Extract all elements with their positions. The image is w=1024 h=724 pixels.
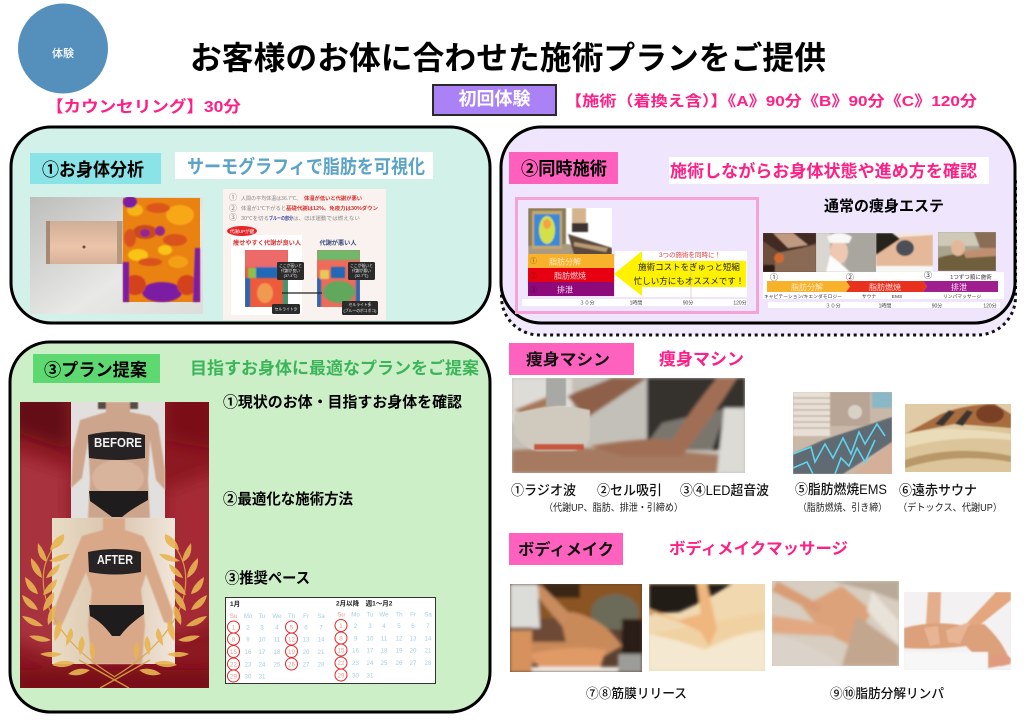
chart: thermal comparison: (37.3℃): [284, 274, 298, 278]
machine captions: ③④LED超音波: [680, 482, 769, 498]
February dates: Su: [337, 612, 345, 618]
February dates: 25: [381, 660, 388, 667]
title: お客様のお体に合わせた施術プランをご提供: [190, 40, 826, 76]
subheading: thermography: サーモグラフィで脂肪を可視化: [187, 155, 425, 178]
February dates: Fr: [410, 612, 416, 618]
February dates: 12: [396, 636, 403, 642]
chart: thermal comparison: ここが高いと: [279, 263, 302, 268]
February dates: 10: [367, 636, 374, 642]
time axis: 1時間: [879, 304, 891, 310]
chart: thermal comparison: 代謝が悪い人: [319, 239, 357, 247]
January dates: 15: [230, 649, 237, 656]
machine captions: （デトックス、代謝UP）: [898, 501, 1002, 514]
step markers: ②: [846, 273, 854, 282]
counseling time: 【カウンセリング】30分: [46, 97, 241, 116]
step markers: 1つずつ順に施術: [950, 273, 992, 281]
heading: slimming machine: [509, 343, 634, 375]
chart: thermal comparison: [223, 189, 386, 320]
time axis: 90分: [683, 300, 693, 306]
photo: leg massage: [904, 592, 1011, 670]
heading: body analysis: ①お身体分析: [42, 160, 144, 180]
January dates: 8: [232, 636, 236, 644]
panel: plan proposal: [10, 342, 490, 712]
January dates: 13: [303, 636, 310, 644]
heading: simultaneous treatment: ②同時施術: [521, 158, 607, 179]
thermal figure: good metabolism: [245, 250, 288, 307]
explanatory notes: ②: [229, 204, 237, 213]
calendar: 1月: [230, 600, 240, 608]
machine captions: ①ラジオ波: [511, 483, 576, 498]
January dates: 22: [230, 662, 237, 668]
January dates: 23: [245, 662, 252, 668]
February dates: 19: [396, 648, 403, 654]
timeline bands: 脂肪分解: [549, 256, 581, 266]
photo: abdomen and thermal image: [30, 197, 203, 314]
photo: treatment with monitor: [528, 208, 612, 254]
massage captions: ⑨⑩脂肪分解リンパ: [830, 686, 944, 701]
February dates: 21: [425, 648, 432, 654]
photo: EMS suit: [793, 392, 892, 474]
February dates: 24: [367, 660, 374, 667]
step markers: ①: [770, 273, 778, 282]
chart: thermal comparison: 代謝が悪い: [352, 268, 371, 273]
timeline bands: 脂肪燃焼: [554, 270, 586, 280]
February dates: 14: [425, 636, 432, 642]
first trial label: [433, 85, 556, 115]
February dates: 1: [339, 623, 343, 630]
January dates: 26: [288, 662, 295, 668]
subheading: body make massage: ボディメイクマッサージ: [669, 539, 848, 558]
photo: slimming machine treatment: [512, 378, 745, 473]
February dates: 13: [410, 636, 417, 642]
January dates: 9: [246, 636, 250, 644]
thermal figure: poor metabolism: [317, 250, 360, 307]
January dates: 10: [259, 636, 266, 644]
heading: plan proposal: ③プラン提案: [44, 360, 147, 380]
subheading: best plan: 目指すお身体に最適なプランをご提案: [190, 358, 479, 378]
chart: thermal comparison: (ブルーのボコボコ): [344, 308, 377, 313]
February dates: 8: [339, 636, 343, 642]
January dates: 30: [245, 674, 252, 680]
timeline bands: 排泄: [557, 284, 573, 294]
before and after image: [20, 402, 209, 688]
explanatory notes: 基礎代謝は12%、免疫力は30%ダウン: [286, 204, 378, 212]
arrow text: 施術コストをぎゅっと短縮: [638, 262, 740, 272]
arrow text: 忙しい方にもオススメです！: [634, 276, 744, 286]
January dates: 16: [245, 649, 252, 656]
January dates: 4: [275, 624, 279, 632]
timeline bands: [528, 254, 614, 296]
January dates: 11: [274, 636, 281, 644]
subheading: check while treating: [669, 157, 989, 184]
machine captions: （脂肪燃焼、引き締）: [798, 501, 887, 514]
time axis: 1時間: [630, 300, 642, 306]
treatment names: EMS: [892, 294, 902, 300]
February dates: [335, 612, 432, 681]
arrow text: 3つの施術を同時に！: [659, 250, 721, 259]
February dates: 30: [352, 672, 359, 680]
January dates: Th: [288, 613, 296, 620]
photo: before: BEFORE: [94, 436, 142, 450]
chart: thermal comparison: ここが低いと: [350, 263, 373, 268]
February dates: 28: [425, 660, 432, 667]
January dates: Su: [230, 613, 238, 620]
photo: EMS: [876, 233, 933, 272]
machine captions: ⑤脂肪燃焼EMS: [795, 481, 887, 497]
January dates: 31: [259, 674, 266, 680]
treatment names: リンパマッサージ: [943, 294, 981, 300]
massage captions: [586, 686, 944, 701]
calendar: 2月以降 週1～月2: [336, 598, 393, 608]
heading: slimming machine: 痩身マシン: [526, 351, 610, 369]
time axis: 120分: [983, 302, 997, 310]
January dates: 2: [246, 624, 250, 632]
time axis: [579, 300, 747, 306]
heading: simultaneous treatment: [509, 152, 618, 184]
photo: after: [52, 518, 175, 664]
January dates: Sa: [317, 613, 325, 620]
February dates: Th: [395, 612, 403, 618]
yellow arrow: [614, 251, 746, 296]
heading: body analysis: [30, 153, 161, 184]
February dates: 18: [381, 648, 388, 654]
February dates: 6: [411, 623, 415, 630]
chart: simultaneous timeline: [516, 198, 758, 312]
photo: back massage: [510, 584, 642, 672]
time axis: ３０分: [825, 302, 841, 310]
panel: body analysis: [11, 127, 490, 323]
chevron bars: 脂肪分解: [791, 282, 823, 292]
January dates: 21: [318, 649, 325, 656]
subheading: slimming machine: 痩身マシン: [659, 350, 744, 369]
chart: normal slimming timeline: [763, 232, 1004, 310]
chart: thermal comparison: 代謝が良い: [281, 268, 300, 273]
treatment names: キャビテーション/キエンダモロジー: [764, 293, 842, 300]
massage captions: ⑦⑧筋膜リリース: [586, 686, 687, 701]
step 3 text: ③推奨ペース: [225, 569, 310, 587]
time axis: [825, 302, 997, 310]
heading: body make: ボディメイク: [518, 540, 614, 559]
laurel wreath: [22, 534, 207, 688]
January dates: 6: [304, 624, 308, 632]
arrow text: [634, 250, 744, 286]
February dates: 29: [338, 672, 345, 680]
machine captions: （代謝UP、脂肪、排泄・引締め）: [544, 501, 683, 514]
February dates: 4: [382, 623, 386, 630]
February dates: 17: [367, 648, 374, 654]
February dates: 23: [352, 660, 359, 667]
dark callouts: [272, 262, 378, 315]
time axis: 90分: [932, 302, 942, 310]
photo: sauna woman: [816, 233, 876, 272]
chevron bars: 排泄: [951, 282, 967, 292]
January dates: 1: [232, 624, 236, 632]
timeline bands: ①: [530, 257, 537, 265]
step markers: ③: [924, 271, 932, 280]
February dates: 3: [368, 623, 372, 630]
explanatory notes: 体温が1℃下がると: [241, 204, 286, 212]
explanatory notes: ブルーの部分: [269, 214, 294, 222]
January dates: Mo: [244, 613, 253, 620]
February dates: 15: [338, 648, 345, 654]
February dates: 11: [381, 636, 388, 642]
photo: thigh massage: [649, 584, 765, 671]
February dates: We: [379, 612, 389, 618]
January dates: 20: [303, 649, 310, 656]
February dates: Sa: [424, 612, 432, 618]
January dates: 18: [274, 649, 281, 656]
January dates: 24: [259, 662, 266, 668]
chart: thermal comparison: セルライト多: [349, 302, 372, 307]
January dates: 14: [318, 636, 325, 644]
January dates: 25: [274, 662, 281, 668]
February dates: 7: [426, 623, 430, 630]
panel: simultaneous treatment: [501, 127, 1016, 335]
explanatory notes: 30℃を切る: [241, 215, 269, 222]
photo: after: AFTER: [97, 553, 133, 567]
explanatory notes: は、ほぼ運動では燃えない: [293, 214, 360, 222]
February dates: 16: [352, 648, 359, 654]
February dates: 27: [410, 660, 417, 667]
heading: normal slimming: 通常の痩身エステ: [824, 197, 944, 215]
experience badge: [18, 4, 108, 94]
treatment names: サウナ: [862, 293, 876, 300]
January dates: 17: [259, 649, 266, 656]
explanatory notes: ①: [229, 193, 237, 202]
explanatory notes: 体温が低いと代謝が悪い: [304, 194, 362, 202]
explanatory notes: [229, 193, 378, 222]
calendar: [226, 598, 436, 684]
February dates: 31: [367, 672, 374, 680]
photo: lymph massage: [938, 232, 996, 271]
treatment names: [764, 293, 981, 300]
machine captions: [511, 481, 1002, 514]
timeline bands: ③: [530, 286, 537, 294]
February dates: 20: [410, 648, 417, 654]
machine captions: ⑥遠赤サウナ: [899, 483, 977, 498]
step 2 text: ②最適化な施術方法: [223, 490, 353, 508]
chart: thermal comparison: (32.7℃): [355, 274, 369, 278]
photo: far-infrared sauna: [905, 404, 1011, 472]
heading: body make: [509, 533, 623, 565]
February dates: 2: [354, 623, 358, 630]
subheading: check while treating: 施術しながらお身体状態や進め方を確認: [670, 161, 977, 181]
photo: abdomen massage: [772, 581, 899, 666]
time axis: ３０分: [579, 300, 595, 306]
January dates: 27: [303, 662, 310, 668]
February dates: 5: [397, 623, 401, 630]
photo: before: [71, 402, 165, 518]
February dates: 9: [354, 636, 358, 642]
explanatory notes: ③: [229, 213, 237, 222]
January dates: 28: [318, 662, 325, 668]
heading: plan proposal: [33, 354, 160, 383]
January dates: Tu: [258, 613, 266, 620]
chevron bars: [767, 281, 998, 292]
January dates: [228, 613, 325, 682]
experience badge: 体験: [52, 46, 74, 60]
timeline bands: ②: [530, 272, 537, 280]
machine captions: ②セル吸引: [597, 483, 662, 498]
January dates: 29: [230, 674, 237, 680]
January dates: 7: [319, 624, 323, 632]
February dates: Tu: [366, 612, 374, 618]
chevron bars: 脂肪燃焼: [869, 282, 901, 292]
step 1 text: ①現状のお体・目指すお身体を確認: [223, 393, 462, 411]
chart: thermal comparison: セルライト少: [275, 306, 298, 312]
photo: cavitation: [763, 233, 816, 272]
dotted outline: [502, 145, 1016, 335]
January dates: 12: [288, 636, 295, 644]
January dates: 3: [260, 624, 264, 632]
treatment times: 【施術（着換え含）】《A》90分《B》90分《C》120分: [565, 92, 977, 110]
chart: thermal comparison: 代謝UPが鍵: [230, 228, 255, 235]
February dates: Mo: [351, 612, 360, 618]
January dates: 5: [290, 624, 294, 632]
January dates: Fr: [303, 613, 309, 620]
explanatory notes: 人間の平均体温は36.7℃、: [241, 194, 301, 202]
step markers: [770, 271, 992, 282]
January dates: We: [272, 613, 282, 620]
February dates: 26: [396, 660, 403, 667]
January dates: 19: [288, 649, 295, 656]
first trial label: 初回体験: [458, 89, 530, 109]
chart: thermal comparison: 痩せやすく代謝が良い人: [233, 239, 302, 247]
time axis: 120分: [733, 300, 747, 306]
February dates: 22: [338, 660, 345, 667]
comparison arrow: [282, 292, 322, 294]
